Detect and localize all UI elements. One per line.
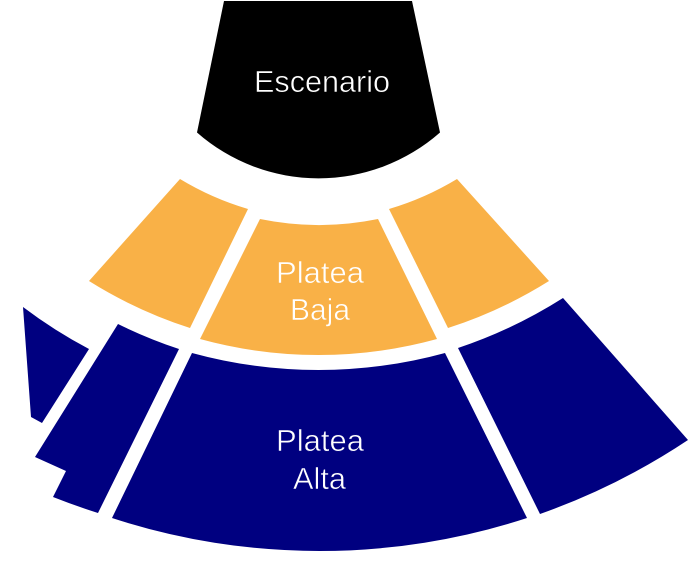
label: Platea Baja	[276, 255, 365, 327]
label: Platea Alta: Alta	[293, 461, 347, 496]
section: right lower stalls	[389, 179, 549, 328]
label: Escenario: Escenario	[254, 64, 390, 99]
section: right upper stalls	[458, 298, 688, 514]
label: Platea Alta	[276, 423, 365, 496]
section: left upper stalls	[35, 324, 179, 513]
label: Platea Baja: Baja	[290, 292, 351, 327]
label: Platea Alta: Platea	[276, 423, 365, 458]
section: left lower stalls	[89, 179, 248, 328]
section: central lower stalls	[200, 219, 437, 355]
section: far left upper stalls	[23, 307, 89, 423]
section: central upper stalls	[112, 353, 527, 551]
panel: stage	[197, 1, 440, 178]
label: Platea Baja: Platea	[276, 255, 365, 290]
